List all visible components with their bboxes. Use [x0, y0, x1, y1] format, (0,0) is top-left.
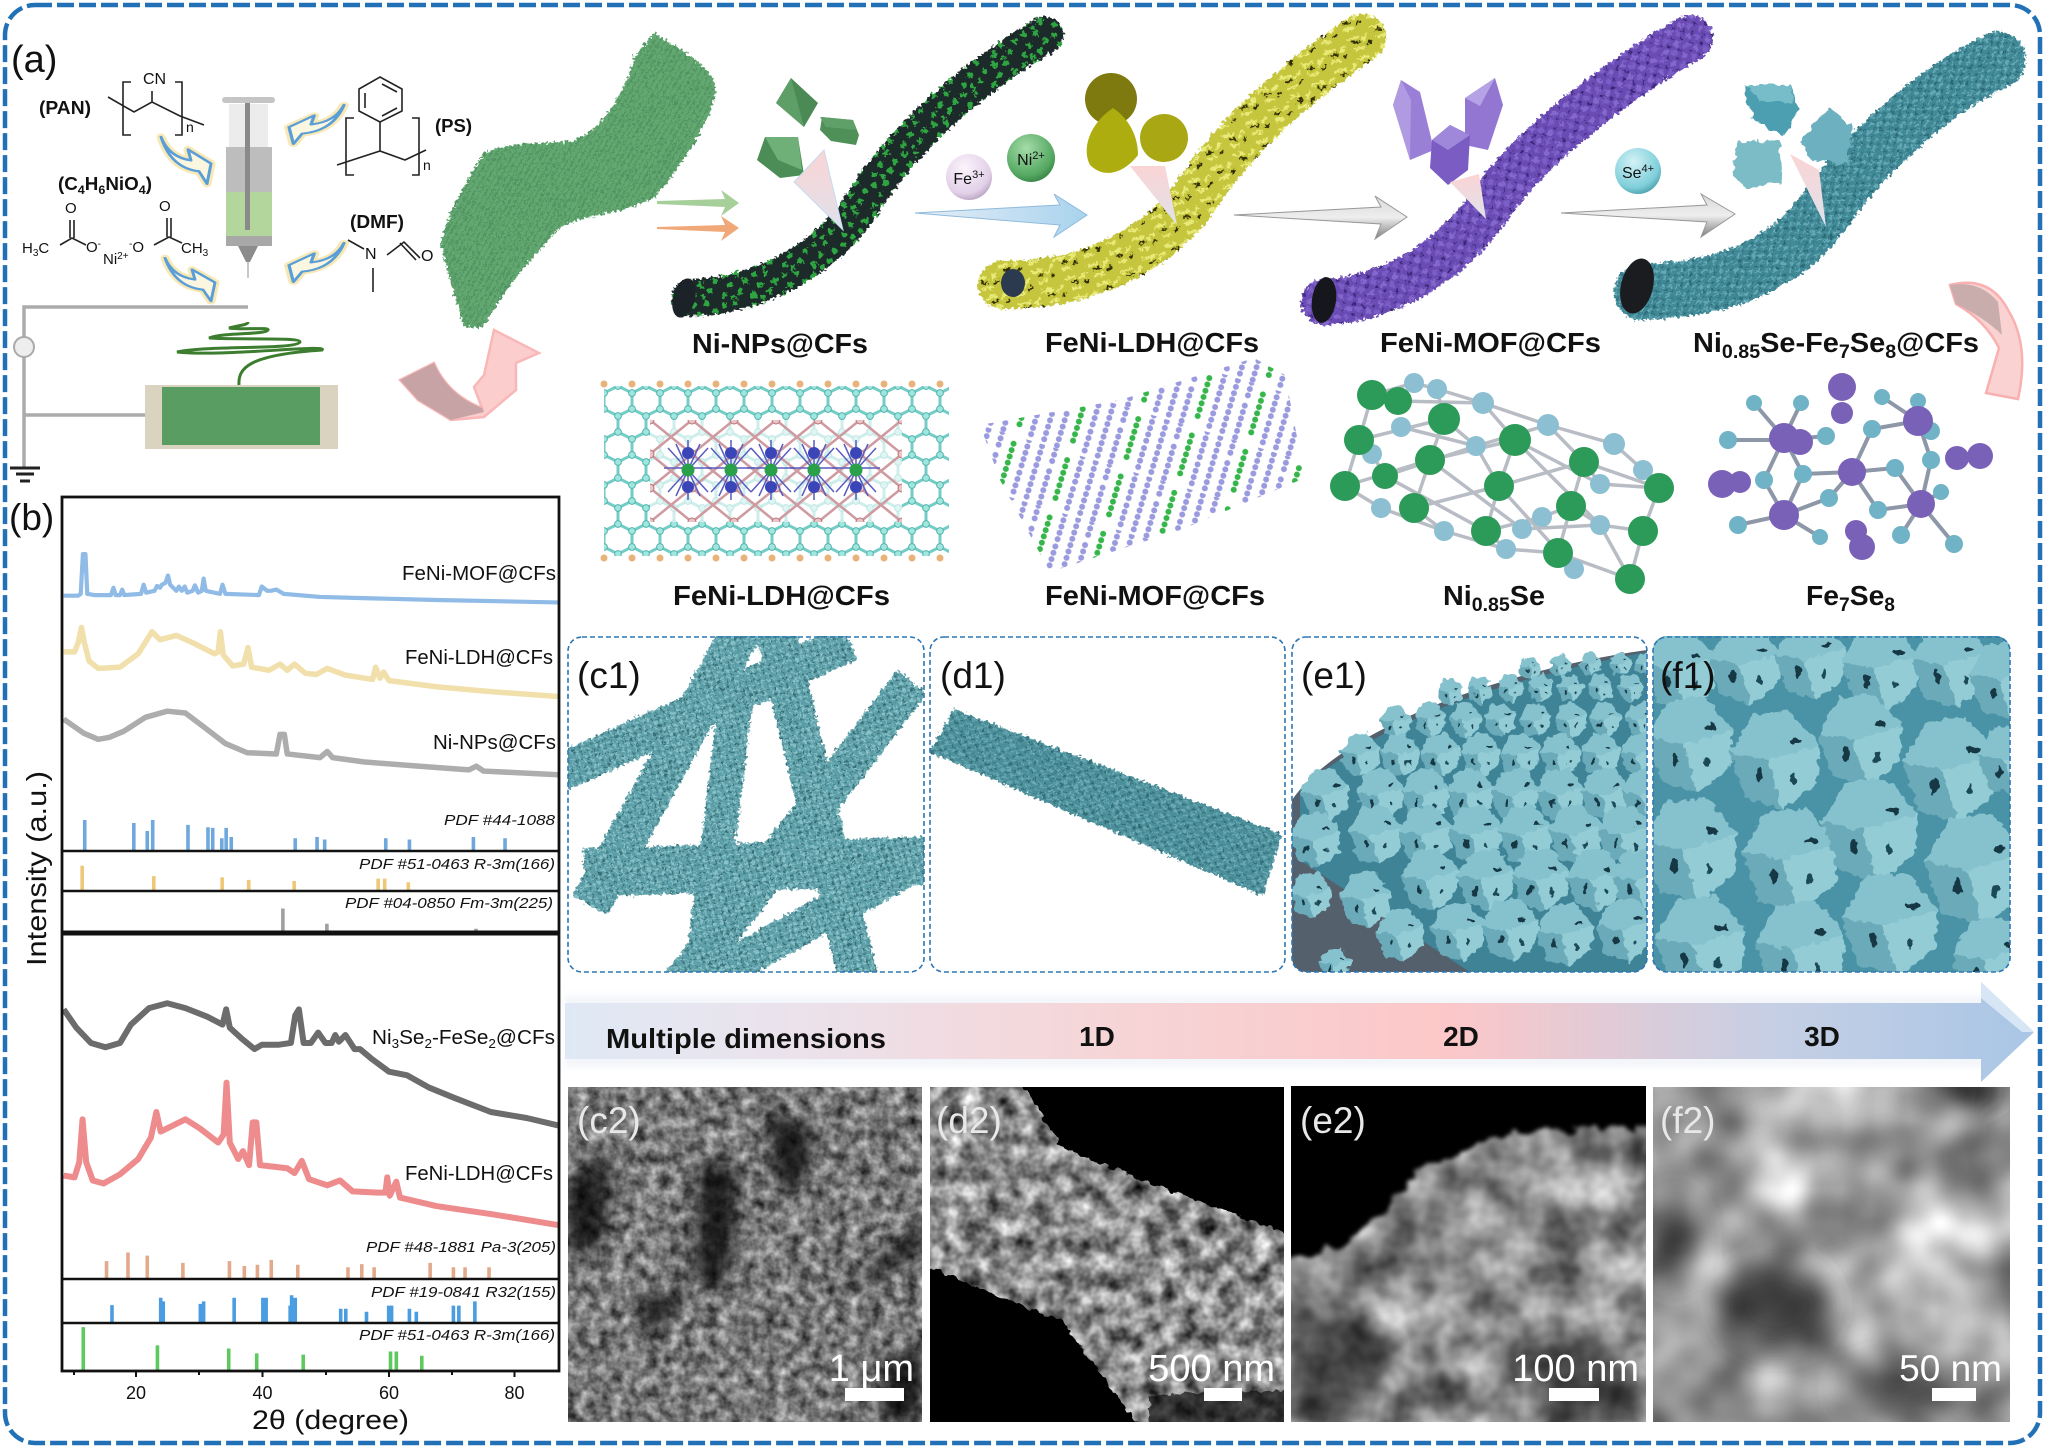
structure labels: Se: [1850, 580, 1884, 611]
structure labels: 0.85: [1472, 595, 1510, 616]
bar labels: 3D: [1804, 1021, 1840, 1052]
label d2: (d2): [936, 1100, 1002, 1141]
dimension arrow bar: [565, 982, 2034, 1082]
PAN structure: CN: [143, 71, 166, 88]
panel d1: single fibre model: [929, 637, 1285, 972]
trace labels: 3: [392, 1036, 399, 1051]
PDF reference labels: PDF #51-0463 R-3m(166): [359, 1327, 555, 1344]
Ni crystals: [757, 78, 859, 178]
fibre labels: [692, 327, 1979, 363]
FeNi-MOF fibre: [1309, 38, 1690, 324]
axis tick labels: 60: [379, 1383, 399, 1403]
trace labels: FeNi-MOF@CFs: [402, 563, 556, 585]
plot frame and dividers: [62, 497, 559, 1377]
structure labels: Ni: [1443, 580, 1471, 611]
nickel acetate structure: -: [129, 239, 132, 250]
ion Fe3+: [946, 154, 992, 200]
nickel acetate structure: O: [132, 239, 144, 256]
DMF structure: O: [421, 248, 433, 265]
PDF reference labels: PDF #44-1088: [444, 812, 556, 829]
bar labels: 1D: [1079, 1021, 1115, 1052]
label e2: (e2): [1300, 1100, 1366, 1141]
curved arrows toward syringe: [161, 105, 344, 301]
PDF reference labels: PDF #48-1881 Pa-3(205): [366, 1239, 556, 1256]
nickel acetate structure: Ni: [103, 251, 117, 268]
structure labels: 8: [1884, 595, 1895, 616]
nickel acetate structure: ): [146, 174, 152, 194]
trace labels: FeNi-LDH@CFs: [405, 1163, 553, 1185]
trace labels: 2: [488, 1036, 496, 1051]
collector with fibre: [145, 322, 338, 449]
ion Fe3+: Fe: [953, 171, 972, 188]
axis tick labels: [126, 1383, 525, 1403]
PDF reference labels: PDF #19-0841 R32(155): [371, 1284, 556, 1301]
nickel acetate structure: 3: [33, 248, 39, 259]
nickel acetate structure: -: [98, 239, 101, 250]
scale bar e2: 100 nm: [1512, 1348, 1639, 1390]
nickel acetate structure: C: [38, 240, 49, 257]
panel e1: crystal array model: [1289, 636, 1669, 982]
PAN structure: (PAN): [39, 97, 91, 118]
trace labels: [372, 563, 556, 1185]
ion Ni2+: Ni: [1017, 152, 1032, 169]
nickel acetate structure: O: [65, 200, 77, 217]
scale bar f2: 50 nm: [1899, 1348, 2002, 1389]
trace labels: @CFs: [496, 1027, 555, 1049]
selenide fibre: [1615, 60, 1998, 317]
DMF structure: (DMF): [350, 211, 404, 232]
fibre labels: Se-Fe: [1760, 327, 1839, 358]
ion Ni2+: 2+: [1032, 150, 1045, 162]
structure labels: FeNi-LDH@CFs: [673, 580, 890, 611]
XRD traces and reference bars: [64, 554, 558, 1370]
ion Se4+: [1615, 148, 1661, 194]
ion Ni2+: [1007, 134, 1055, 182]
panel c1: fibre network model: [567, 636, 925, 973]
DMF structure: N: [365, 246, 377, 263]
selenide crystals: [1733, 85, 1852, 188]
nickel acetate structure: 2+: [117, 251, 129, 262]
nickel acetate structure: CH: [181, 240, 203, 257]
structure labels: [673, 580, 1895, 616]
nickel acetate structure: (C: [58, 174, 77, 194]
arrow gray 1: [1234, 196, 1407, 239]
label c2: (c2): [577, 1100, 641, 1141]
fibre labels: 0.85: [1722, 342, 1761, 363]
Fe7Se8 crystal structure: [1708, 373, 1993, 560]
panel f1: crystal close-up model: [1652, 636, 2011, 973]
axis tick labels: 80: [504, 1383, 525, 1403]
LDH crystal structure: [604, 384, 949, 558]
fibre labels: 8: [1885, 342, 1896, 363]
electrospun fibre mat: [441, 33, 716, 327]
bar labels: [606, 1021, 1840, 1054]
trace labels: FeNi-LDH@CFs: [405, 647, 553, 669]
Ni0.85Se crystal structure: [1330, 373, 1674, 594]
bar labels: Multiple dimensions: [606, 1023, 886, 1054]
panel d2: SEM image: [930, 1087, 1284, 1422]
nickel acetate structure: H: [22, 240, 33, 257]
PAN structure: n: [186, 119, 194, 135]
label e1: (e1): [1301, 655, 1367, 696]
panel a: synthesis scheme: [10, 33, 2022, 616]
PAN structure: [39, 71, 204, 135]
trace labels: -FeSe: [432, 1027, 488, 1049]
fibre labels: @CFs: [1896, 327, 1979, 358]
arrow gray 2: [1561, 194, 1735, 237]
label d1: (d1): [940, 655, 1006, 696]
pink curved arrow right: [1950, 283, 2022, 399]
label (b): (b): [9, 497, 54, 538]
label c1: (c1): [577, 655, 641, 696]
ion Fe3+: 3+: [972, 169, 985, 181]
pointer LDH: [1130, 166, 1177, 225]
label f1: (f1): [1660, 655, 1716, 696]
structure labels: 7: [1839, 595, 1850, 616]
panel b: XRD chart: [9, 497, 559, 1435]
trace labels: Ni: [372, 1027, 391, 1049]
Ni-NPs fibre: [668, 35, 1045, 320]
panel c2: SEM image: [568, 1087, 922, 1422]
PS structure: [337, 77, 472, 175]
y axis title: Intensity (a.u.): [21, 771, 52, 966]
structure labels: Se: [1510, 580, 1545, 611]
trace labels: 2: [424, 1036, 432, 1051]
FeNi-LDH fibre: [1001, 38, 1362, 297]
fibre labels: Ni-NPs@CFs: [692, 328, 868, 359]
pointer MOF: [1450, 174, 1486, 219]
PDF reference labels: [345, 812, 556, 1344]
panel e2: SEM image: [1291, 1086, 1646, 1422]
fibre labels: Ni: [1693, 327, 1721, 358]
trace labels: Se: [399, 1027, 424, 1049]
nickel acetate structure: H: [85, 174, 98, 194]
arrow blue: [915, 194, 1087, 237]
PDF reference labels: PDF #04-0850 Fm-3m(225): [345, 895, 553, 912]
MOF crystal structure: [980, 358, 1305, 572]
pointer selenide: [1790, 154, 1826, 227]
PS structure: (PS): [435, 115, 472, 136]
pointer Ni: [794, 150, 843, 230]
nickel acetate structure: [22, 174, 209, 268]
LDH sheets: [1085, 73, 1196, 173]
panel f2: SEM image: [1653, 1068, 2010, 1422]
trace labels: Ni-NPs@CFs: [433, 732, 556, 754]
structure labels: Fe: [1806, 580, 1839, 611]
fibre labels: FeNi-LDH@CFs: [1045, 327, 1259, 358]
axis tick labels: 20: [126, 1383, 146, 1403]
bar labels: 2D: [1443, 1021, 1479, 1052]
PDF reference labels: PDF #51-0463 R-3m(166): [359, 856, 555, 873]
MOF crystals: [1393, 78, 1503, 185]
nickel acetate structure: 3: [203, 248, 209, 259]
small reagent arrows: [657, 190, 739, 241]
pink curved arrow left: [400, 330, 539, 420]
fibre labels: FeNi-MOF@CFs: [1380, 327, 1601, 358]
label f2: (f2): [1660, 1100, 1716, 1141]
nickel acetate structure: 6: [98, 183, 106, 197]
nickel acetate structure: 4: [78, 183, 85, 197]
scale bar c2: 1 μm: [829, 1348, 914, 1390]
axis tick labels: 40: [252, 1383, 273, 1403]
ion Se4+: 4+: [1642, 163, 1654, 175]
fibre labels: 7: [1839, 342, 1850, 363]
scale bar d2: 500 nm: [1148, 1348, 1275, 1390]
electrospinning circuit: [10, 307, 248, 481]
x axis title: 2θ (degree): [252, 1405, 409, 1435]
syringe: [222, 97, 275, 278]
nickel acetate structure: O: [86, 239, 98, 256]
structure labels: FeNi-MOF@CFs: [1045, 580, 1265, 611]
fibre labels: Se: [1850, 327, 1885, 358]
nickel acetate structure: NiO: [105, 174, 139, 194]
nickel acetate structure: 4: [139, 183, 146, 197]
DMF structure: [348, 211, 433, 292]
nickel acetate structure: O: [159, 198, 171, 215]
ion Se4+: Se: [1622, 165, 1642, 182]
PS structure: n: [423, 157, 431, 173]
label (a): (a): [11, 39, 57, 81]
